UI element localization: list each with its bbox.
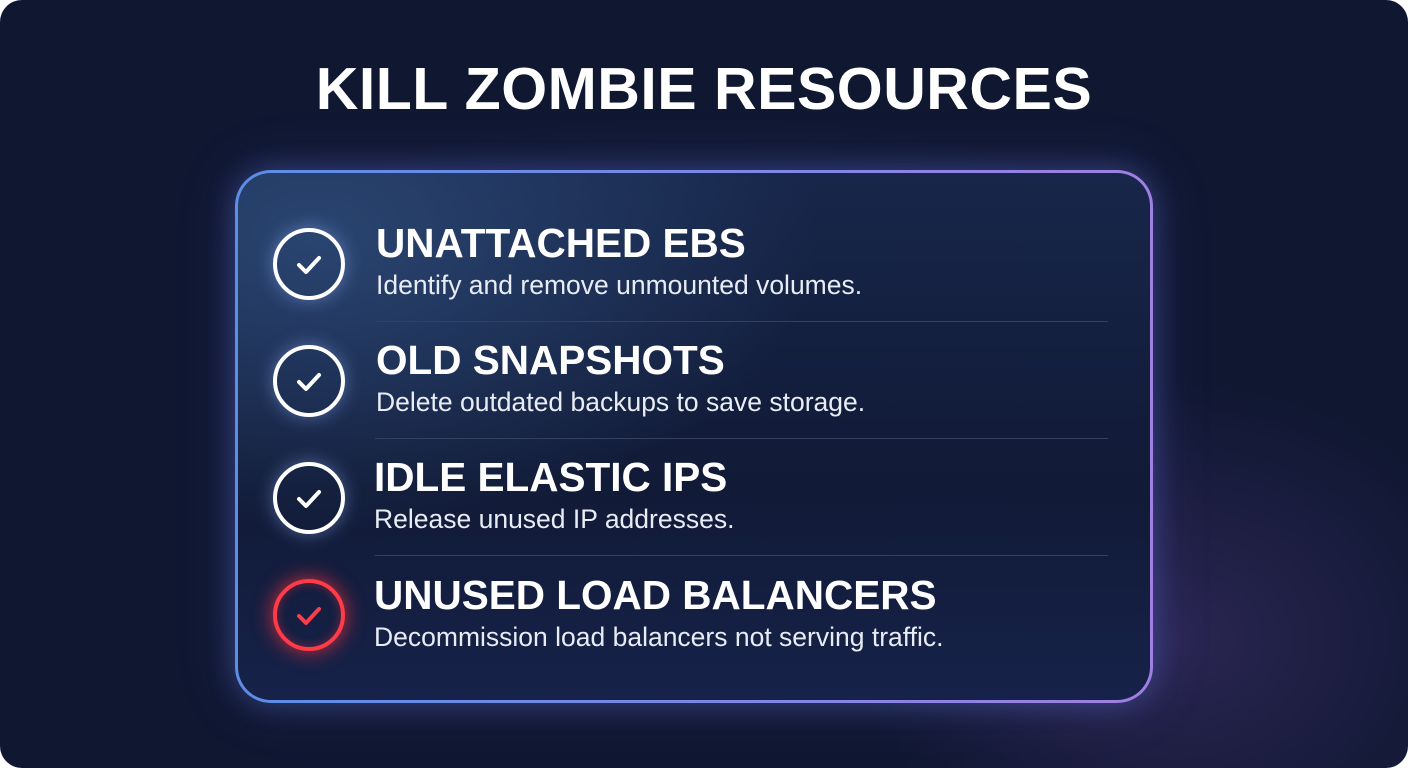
item 4 icon (red)	[273, 579, 345, 651]
item 2 icon	[273, 345, 345, 417]
item 3 heading: IDLE ELASTIC IPS	[374, 454, 727, 500]
item 2 text: Delete outdated backups to save storage.	[376, 387, 865, 417]
item 2 heading: OLD SNAPSHOTS	[376, 337, 725, 383]
item 4 heading: UNUSED LOAD BALANCERS	[374, 572, 937, 618]
item 3 icon	[273, 462, 345, 534]
item 1 heading: UNATTACHED EBS	[376, 220, 746, 266]
title: KILL ZOMBIE RESOURCES	[316, 56, 1092, 122]
item 4 text: Decommission load balancers not serving traffic.	[374, 622, 944, 652]
item 1 icon	[273, 228, 345, 300]
item 3 text: Release unused IP addresses.	[374, 504, 734, 534]
item 1 text: Identify and remove unmounted volumes.	[376, 270, 862, 300]
panel: checklist	[235, 170, 1153, 703]
